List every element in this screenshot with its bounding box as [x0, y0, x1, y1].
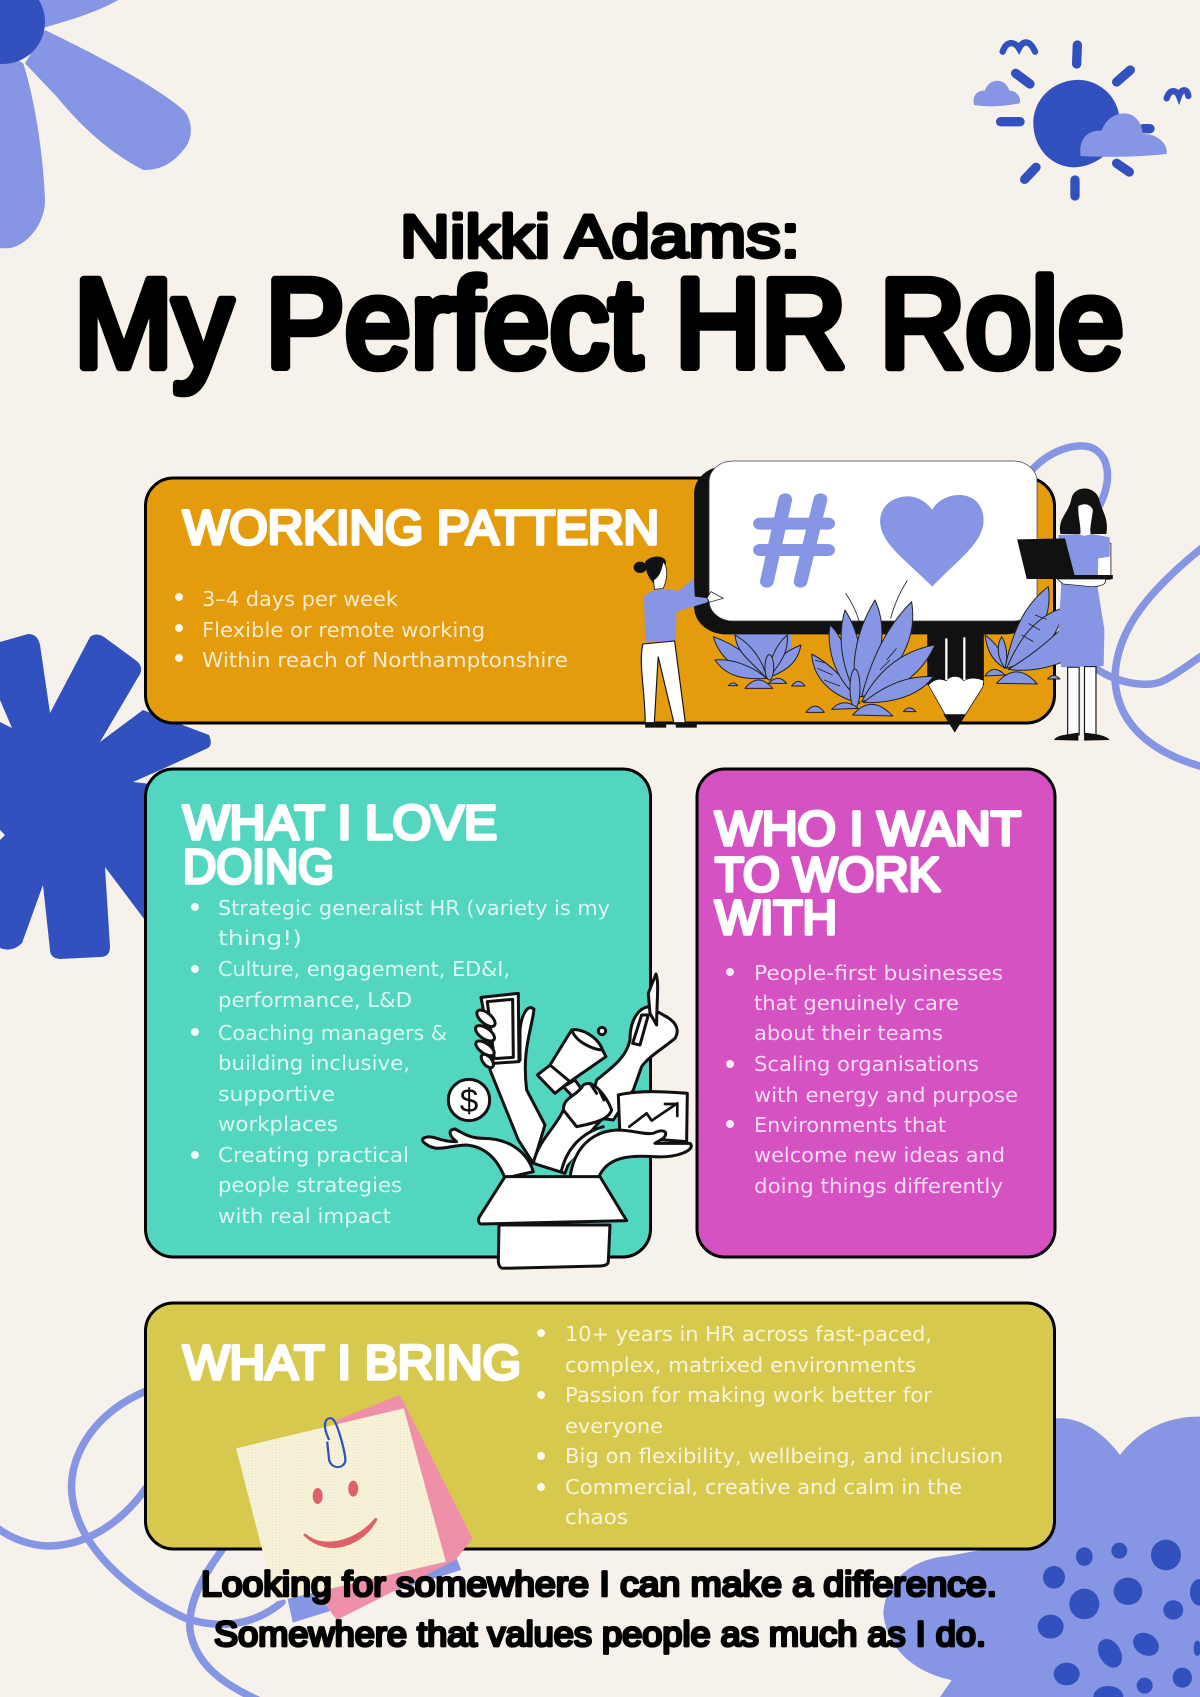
- list: what i love doing: Creating practical: [218, 1143, 409, 1167]
- icon: left plant: [713, 630, 805, 688]
- list: what i bring: complex, matrixed environments: [565, 1353, 916, 1377]
- heading: what i love doing: [183, 797, 497, 894]
- list: what i bring: Commercial, creative and calm in the: [565, 1475, 962, 1499]
- list: what i bring: chaos: [565, 1505, 628, 1529]
- list: who i want to work with: welcome new ideas and: [754, 1143, 1005, 1167]
- list: who i want to work with: Scaling organisations: [754, 1052, 979, 1076]
- list: what i bring: Passion for making work better for: [565, 1383, 933, 1407]
- icon: right open hand: [570, 1130, 691, 1178]
- list: what i love doing: thing!): [218, 926, 302, 950]
- list: working pattern: Within reach of Northamptonshire: [202, 648, 568, 672]
- decorative loops: bottom left: [0, 1391, 282, 1697]
- illustration: social media billboard with two people: [634, 461, 1113, 741]
- icon: heart: [880, 495, 984, 587]
- decorative asterisk flower: left: [0, 634, 211, 959]
- list: who i want to work with: that genuinely care: [754, 991, 959, 1015]
- icon: hand holding pen: [587, 974, 677, 1120]
- illustration: sticky note with smiley: [236, 1395, 473, 1623]
- figure: woman with laptop: [1017, 489, 1113, 741]
- list: what i love doing: people strategies: [218, 1173, 402, 1197]
- icon: centre plant: [806, 581, 935, 716]
- list: who i want to work with: [726, 961, 1018, 1198]
- icon: right plant: [985, 587, 1063, 684]
- title: [74, 203, 1124, 394]
- list: who i want to work with: doing things differently: [754, 1174, 1003, 1198]
- list: what i bring: 10+ years in HR across fast-paced,: [565, 1322, 932, 1346]
- closing statement: Looking for somewhere I can make a difference.: [201, 1565, 997, 1604]
- subtitle: name: Nikki Adams:: [400, 203, 800, 270]
- heading: who i want to work with: WHO I WANT: [715, 803, 1021, 856]
- list: who i want to work with: with energy and purpose: [754, 1083, 1018, 1107]
- panel: working pattern: [146, 478, 1054, 723]
- icon: hand holding megaphone: [533, 1027, 612, 1173]
- heading: what i bring: WHAT I BRING: [183, 1337, 521, 1390]
- list: what i love doing: Culture, engagement, ED&I,: [218, 957, 510, 981]
- list: what i love doing: [191, 896, 610, 1228]
- list: what i love doing: with real impact: [218, 1204, 391, 1228]
- main title: My Perfect HR Role: [74, 253, 1124, 394]
- list: what i love doing: performance, L&D: [218, 988, 412, 1012]
- list: working pattern: 3–4 days per week: [202, 587, 398, 611]
- icon: open box: [478, 1177, 627, 1268]
- list: what i love doing: workplaces: [218, 1112, 338, 1136]
- icon: paperclip: [325, 1418, 345, 1467]
- panel: who i want to work with: [697, 769, 1055, 1257]
- list: who i want to work with: Environments that: [754, 1113, 946, 1137]
- icon: growth chart card: [618, 1092, 687, 1142]
- smiley face: [305, 1481, 376, 1547]
- icon: dollar coin: [448, 1079, 490, 1121]
- closing statement: Somewhere that values people as much as I do.: [214, 1615, 986, 1654]
- panel: what i bring: [146, 1303, 1054, 1549]
- list: working pattern: [175, 587, 568, 672]
- figure: person pointing: [634, 556, 723, 728]
- decorative flower with dots: bottom right: [883, 1417, 1200, 1697]
- icon: hashtag: [760, 499, 828, 582]
- icon: pencil: [927, 630, 984, 733]
- icon: hand holding phone: [473, 993, 545, 1163]
- list: what i bring: everyone: [565, 1414, 663, 1438]
- heading: what i love doing: DOING: [183, 841, 334, 894]
- decorative flower: top left: [0, 0, 191, 248]
- list: who i want to work with: People-first businesses: [754, 961, 1003, 985]
- list: what i bring: Big on flexibility, wellbeing, and inclusion: [565, 1444, 1003, 1468]
- list: working pattern: Flexible or remote working: [202, 618, 485, 642]
- list: what i love doing: Coaching managers &: [218, 1021, 447, 1045]
- heading: working pattern: WORKING PATTERN: [183, 502, 659, 555]
- list: who i want to work with: about their teams: [754, 1021, 943, 1045]
- closing statement: [201, 1565, 997, 1654]
- heading: what i love doing: WHAT I LOVE: [183, 797, 497, 850]
- list: what i love doing: building inclusive,: [218, 1051, 410, 1075]
- list: what i love doing: supportive: [218, 1082, 335, 1106]
- heading: who i want to work with: TO WORK: [715, 849, 940, 902]
- decorative loops: right side: [1032, 446, 1200, 767]
- heading: who i want to work with: [715, 803, 1021, 945]
- list: what i bring: [537, 1322, 1003, 1529]
- panel: what i love doing: [146, 769, 650, 1257]
- heading: who i want to work with: WITH: [715, 892, 837, 945]
- icon: left open hand: [423, 1129, 533, 1178]
- illustration: hands reaching out of a box: [423, 974, 691, 1268]
- icon: speech bubble: [694, 461, 1037, 634]
- list: what i love doing: Strategic generalist HR (variety is my: [218, 896, 610, 920]
- icon: sun with clouds: [974, 42, 1188, 196]
- icon: dollar coin: $: [460, 1083, 478, 1120]
